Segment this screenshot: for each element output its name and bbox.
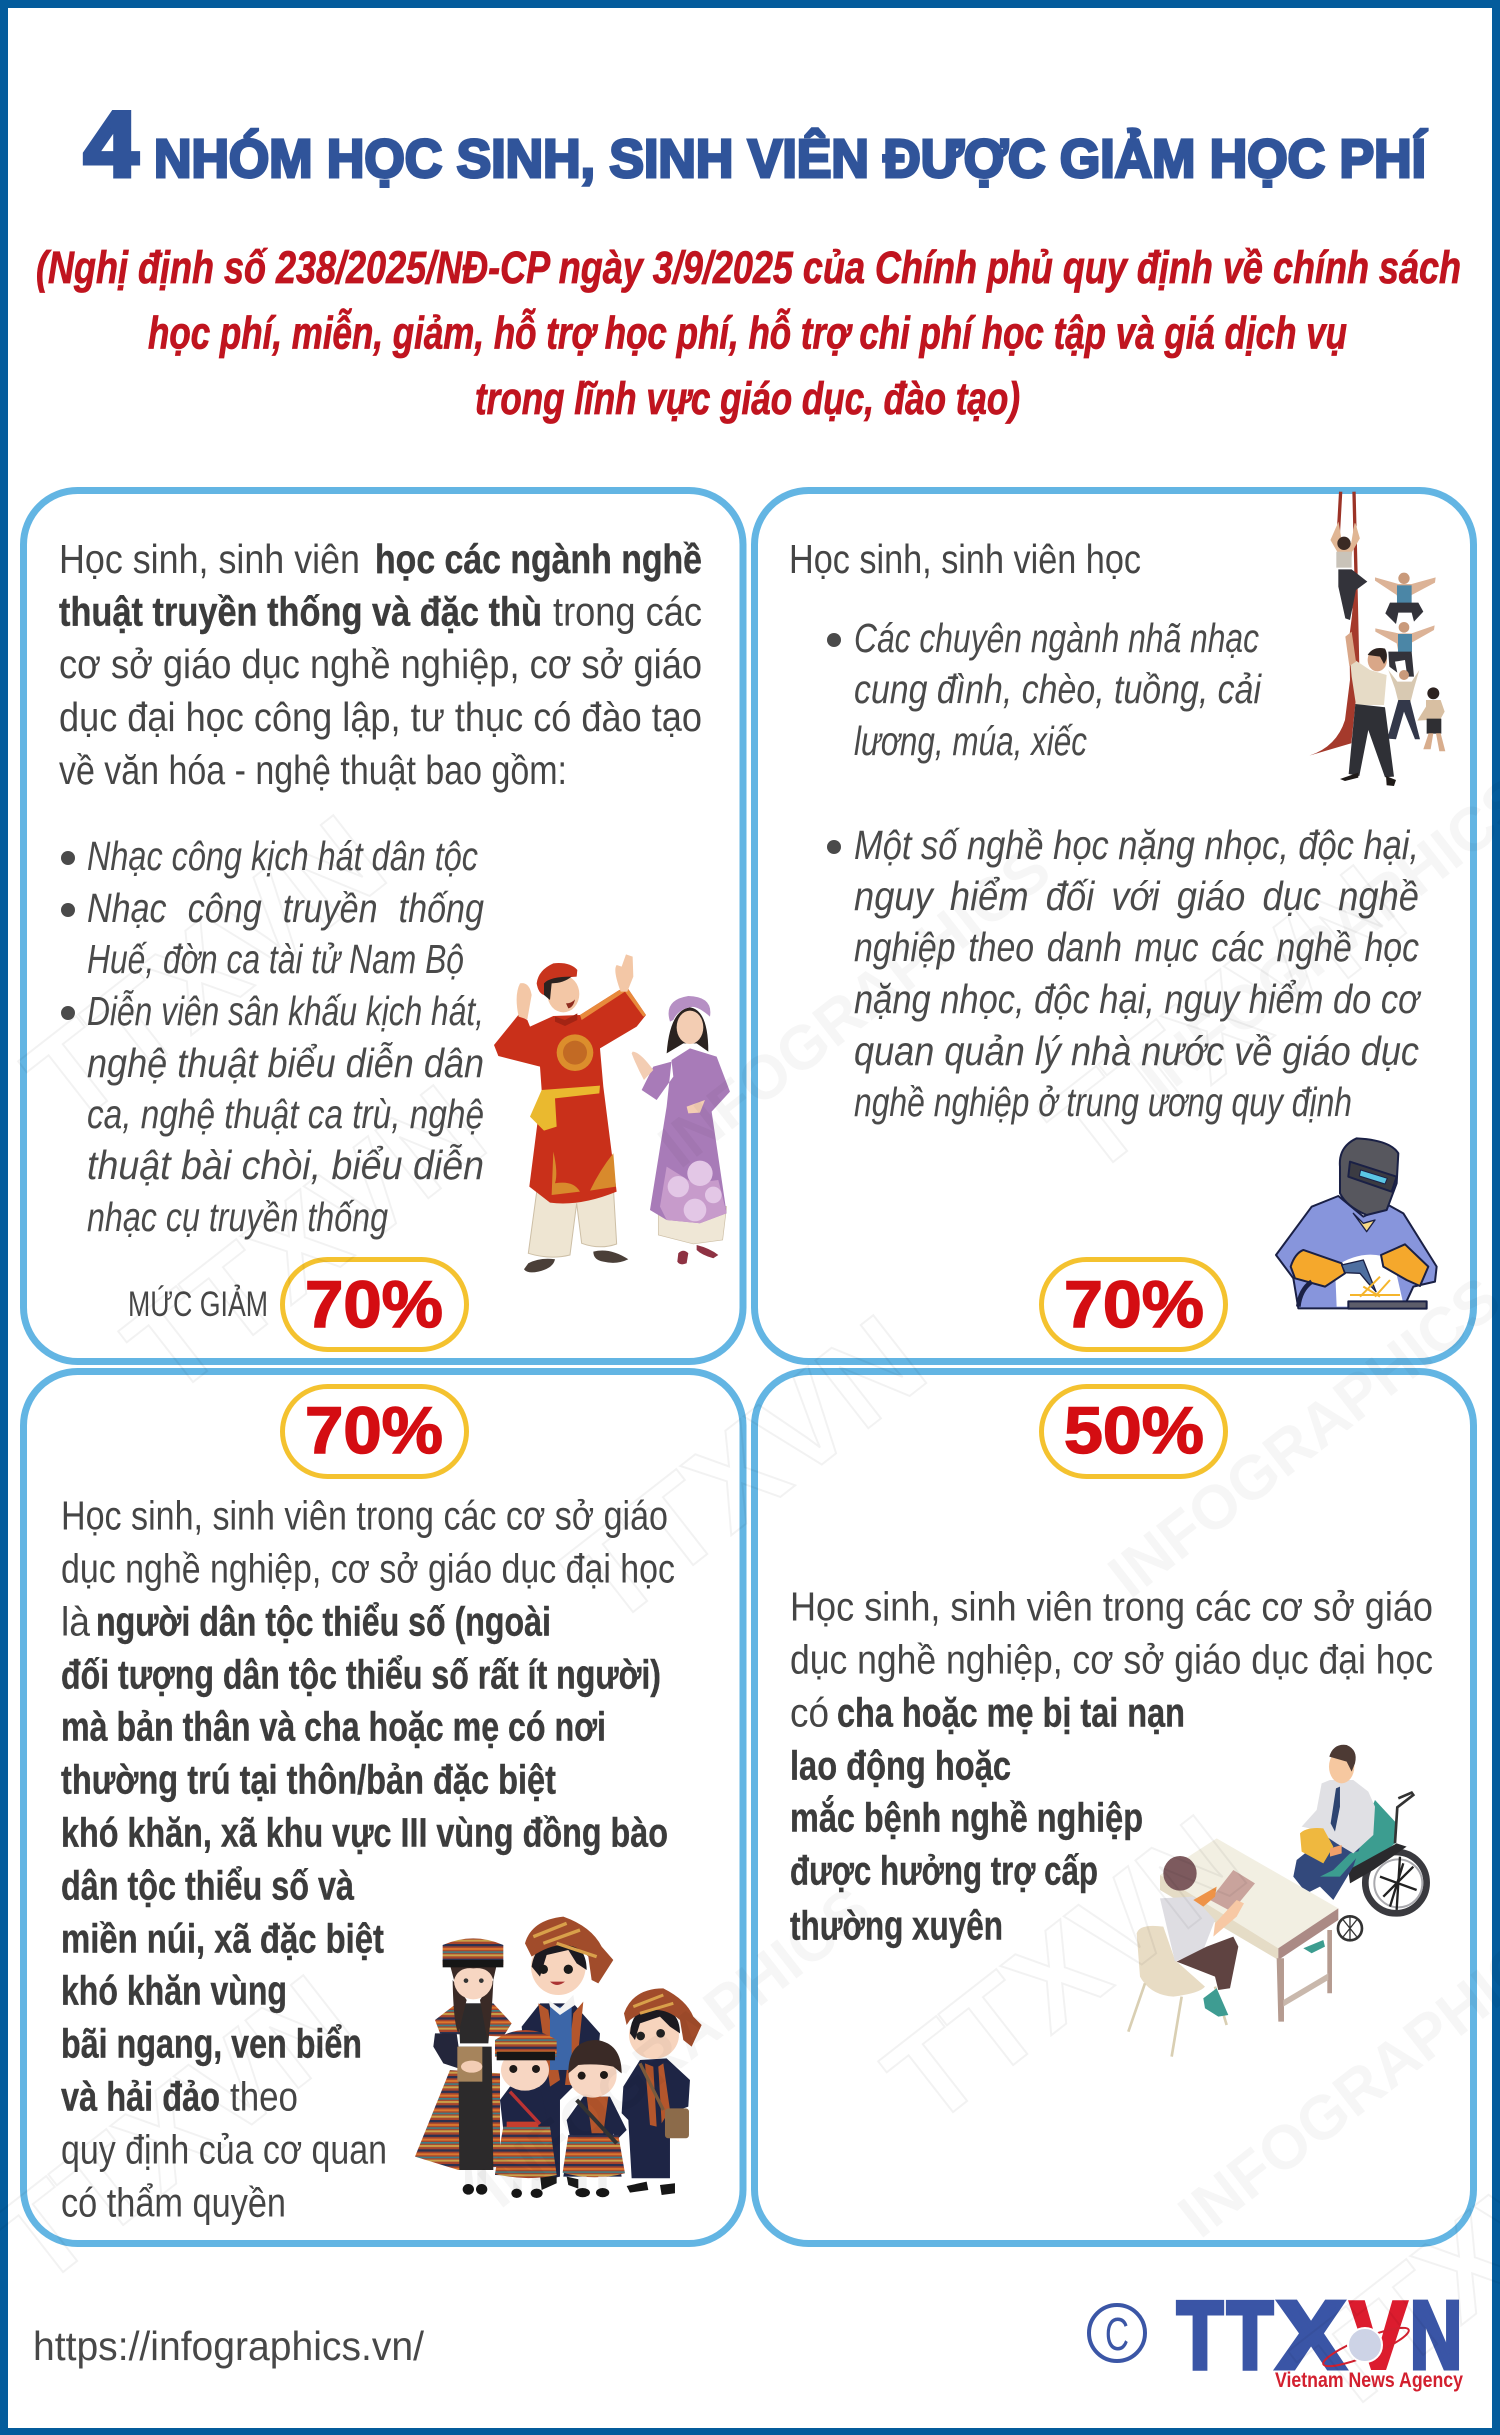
panel 3 text: và hải đảo xyxy=(61,2074,220,2120)
panel 2 intro text: Học sinh, sinh viên học xyxy=(789,536,1141,582)
panel 3 text: dục nghề nghiệp, cơ sở giáo dục đại học xyxy=(61,1546,675,1592)
icon: circus acrobats xyxy=(1309,492,1445,786)
panel 1 bullet list: Nhạc công truyền thống xyxy=(87,885,484,931)
panel 1 intro text: cơ sở giáo dục nghề nghiệp, cơ sở giáo xyxy=(59,641,702,687)
title: NHÓM HỌC SINH, SINH VIÊN ĐƯỢC GIẢM HỌC PHÍ xyxy=(154,128,1428,189)
title: 4 xyxy=(84,94,138,196)
panel 1 intro text: học các ngành nghề xyxy=(375,536,702,582)
panel 1 bullet list: Nhạc công kịch hát dân tộc xyxy=(87,833,478,879)
panel 4 text: cha hoặc mẹ bị tai nạn xyxy=(837,1690,1185,1736)
panel: traditional arts students xyxy=(24,490,743,1362)
panel 2 bullet: hazardous trades: quan quản lý nhà nước về giáo dục xyxy=(854,1028,1419,1074)
panel 1 intro text: Học sinh, sinh viên xyxy=(59,536,360,582)
watermark: TTXVN xyxy=(1,789,409,1151)
panel 3 text: là xyxy=(61,1598,90,1644)
logo: TTXVN: T xyxy=(1227,2282,1273,2389)
logo: TTXVN: N xyxy=(1410,2282,1462,2389)
panel 1 bullet list: thuật bài chòi, biểu diễn xyxy=(87,1142,484,1188)
icon: wheelchair user at desk xyxy=(1128,1745,1427,2057)
badge: 70 percent xyxy=(282,1260,466,1350)
icon: copyright: C xyxy=(1105,2308,1129,2360)
panel 4 text: được hưởng trợ cấp xyxy=(790,1848,1098,1894)
badge: 50 percent xyxy=(1042,1386,1226,1476)
watermark: TTXVN xyxy=(1021,839,1429,1201)
panel 1 intro text xyxy=(59,536,702,793)
panel 2 bullet: hazardous trades: nghề nghiệp ở trung ương quy định xyxy=(854,1079,1352,1125)
badge: 70 percent xyxy=(1042,1260,1226,1350)
panel: ethnic minority students xyxy=(24,1372,743,2244)
badge: 70 percent xyxy=(282,1386,466,1476)
watermark xyxy=(0,764,1500,2435)
panel 2 bullet: performing arts: lương, múa, xiếc xyxy=(854,718,1087,764)
panel 4 text: có xyxy=(790,1690,829,1736)
panel 1 intro text: thuật truyền thống và đặc thù xyxy=(59,588,542,634)
logo: TTXVN xyxy=(1177,2282,1463,2392)
watermark: INFOGRAPHICS xyxy=(646,834,1063,1181)
title xyxy=(84,94,1428,196)
panel 1 bullet list: nhạc cụ truyền thống xyxy=(87,1194,388,1240)
panel 2 bullet: hazardous trades: nguy hiểm đối với giáo dục nghề xyxy=(854,873,1419,919)
panel 1 bullet list: Diễn viên sân khấu kịch hát, xyxy=(87,988,484,1034)
panel 3 text: quy định của cơ quan xyxy=(61,2126,387,2172)
subtitle: legal reference: trong lĩnh vực giáo dục, đào tạo) xyxy=(475,373,1020,424)
panel 3 text: thường trú tại thôn/bản đặc biệt xyxy=(61,1756,556,1802)
panel: performing arts and hazardous trades xyxy=(754,490,1474,1362)
panel 1 bullet list: ca, nghệ thuật ca trù, nghệ xyxy=(87,1091,484,1137)
panel 3 text: khó khăn, xã khu vực III vùng đồng bào xyxy=(61,1810,668,1856)
footer url: https://infographics.vn/ xyxy=(33,2323,425,2369)
panel 1 bullet list: Huế, đờn ca tài tử Nam Bộ xyxy=(87,936,464,982)
panel 3 text: mà bản thân và cha hoặc mẹ có nơi xyxy=(61,1704,606,1750)
panel 3 text: khó khăn vùng xyxy=(61,1968,287,2014)
panel 1 bullet list: nghệ thuật biểu diễn dân xyxy=(87,1040,484,1086)
logo: TTXVN: V xyxy=(1350,2282,1407,2389)
icon: traditional singers xyxy=(494,954,730,1272)
panel 2 bullet: performing arts xyxy=(827,615,1263,764)
panel 3 text: dân tộc thiểu số và xyxy=(61,1862,354,1908)
panel 1 intro text: trong các xyxy=(553,588,702,634)
panel: children of injured workers xyxy=(754,1372,1474,2244)
panel 1 intro text: dục đại học công lập, tư thục có đào tạo xyxy=(59,694,702,740)
logo: TTXVN: X xyxy=(1277,2282,1345,2389)
icon: welder xyxy=(1276,1138,1437,1309)
panel 3 text: Học sinh, sinh viên trong các cơ sở giáo xyxy=(61,1492,668,1538)
panel 3 text: có thẩm quyền xyxy=(61,2180,286,2226)
badge: 70 percent: 70% xyxy=(1064,1267,1204,1341)
panel 4 text: lao động hoặc xyxy=(790,1742,1011,1788)
panel 1 intro text: về văn hóa - nghệ thuật bao gồm: xyxy=(59,747,567,793)
icon: ethnic minority children xyxy=(415,1917,702,2198)
icon: copyright xyxy=(1089,2305,1145,2361)
panel 2 bullet: hazardous trades xyxy=(827,822,1422,1125)
watermark: INFOGRAPHICS xyxy=(466,1874,883,2221)
panel 3 text xyxy=(61,1492,675,2226)
label: reduction level: MỨC GIẢM xyxy=(128,1284,268,1324)
panel 3 text: miền núi, xã đặc biệt xyxy=(61,1916,384,1962)
badge: 70 percent: 70% xyxy=(305,1393,443,1467)
panel 4 text: Học sinh, sinh viên trong các cơ sở giáo xyxy=(790,1584,1433,1630)
panel 4 text xyxy=(790,1584,1433,1948)
panel 1 bullet list xyxy=(61,833,484,1240)
watermark: TTXVN xyxy=(861,1789,1269,2151)
watermark: TTXVN xyxy=(101,1059,509,1421)
logo: TTXVN: Vietnam News Agency xyxy=(1275,2369,1463,2392)
panel 3 text: bãi ngang, ven biển xyxy=(61,2020,362,2066)
watermark: TTXVN xyxy=(541,1289,949,1651)
badge: 70 percent: 70% xyxy=(305,1267,443,1341)
logo: TTXVN: T xyxy=(1177,2282,1223,2389)
panel 3 text: theo xyxy=(230,2074,298,2120)
panel 4 text: thường xuyên xyxy=(790,1902,1003,1948)
panel 3 text: người dân tộc thiểu số (ngoài xyxy=(96,1598,551,1644)
panel 2 bullet: performing arts: cung đình, chèo, tuồng, cải xyxy=(854,666,1263,712)
panel 3 text: đối tượng dân tộc thiểu số rất ít người) xyxy=(61,1652,661,1698)
subtitle: legal reference xyxy=(36,242,1461,424)
panel 4 text: mắc bệnh nghề nghiệp xyxy=(790,1794,1143,1840)
badge: 50 percent: 50% xyxy=(1064,1393,1204,1467)
panel 2 bullet: performing arts: Các chuyên ngành nhã nhạc xyxy=(854,615,1259,661)
